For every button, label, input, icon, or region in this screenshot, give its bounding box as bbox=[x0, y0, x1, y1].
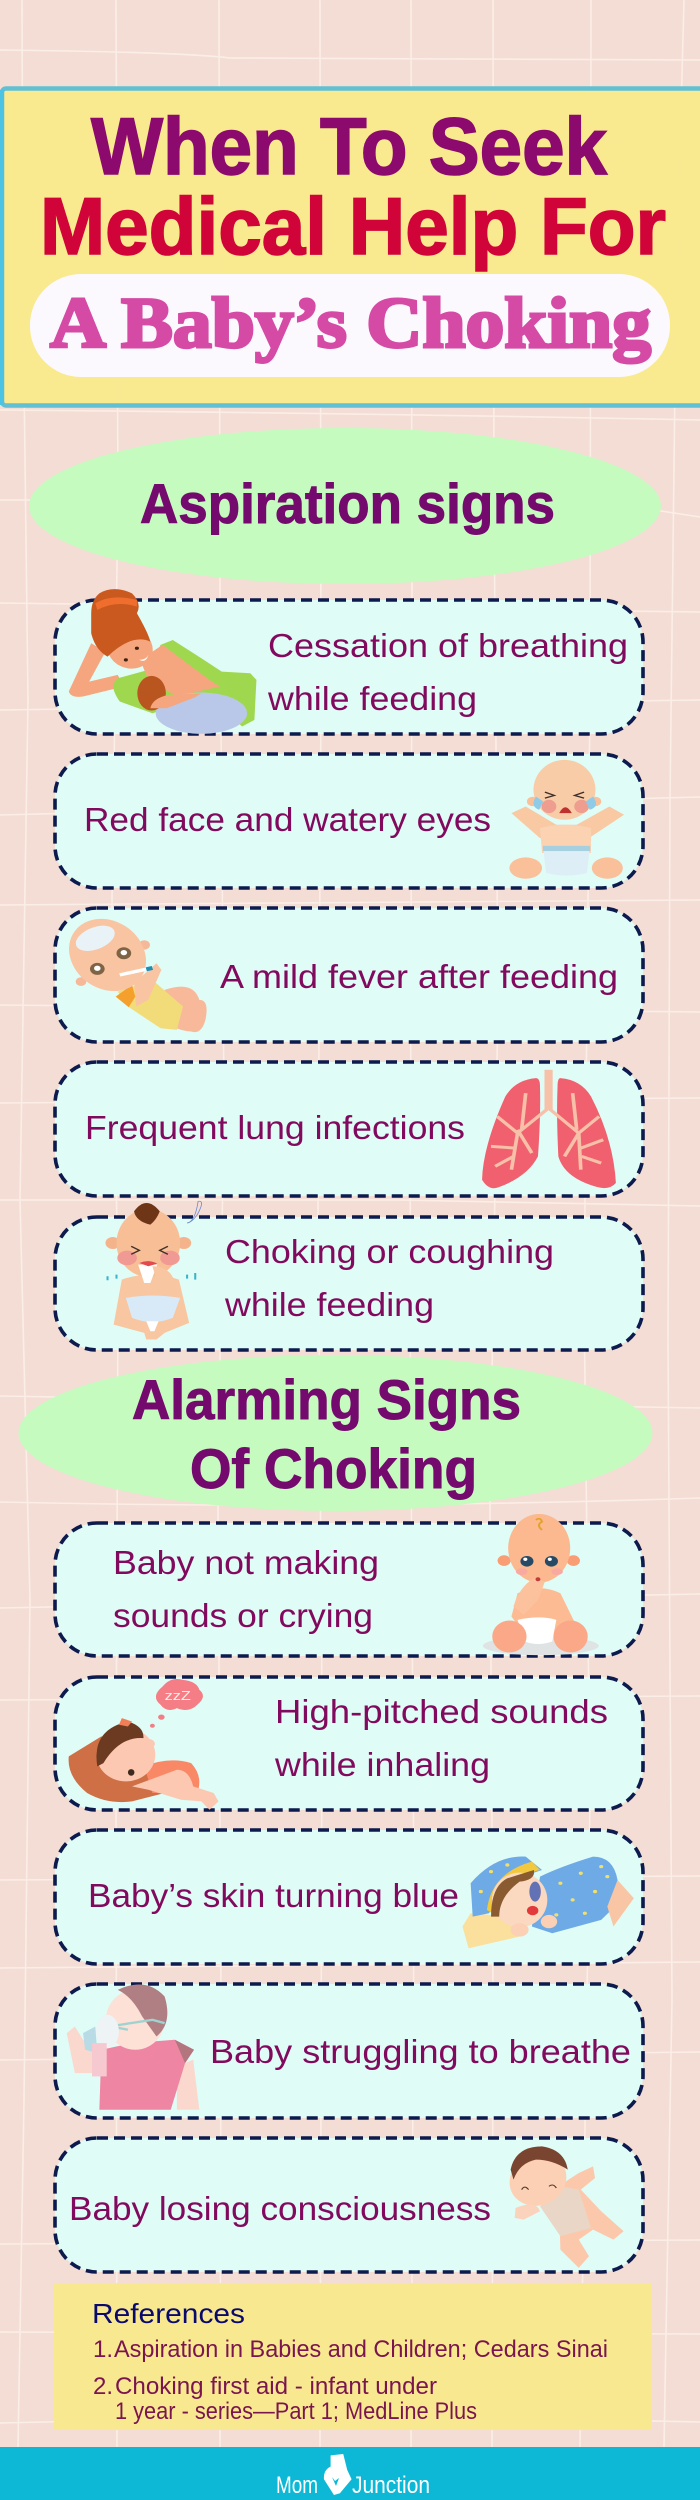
card: choking or coughing bbox=[55, 1201, 643, 1350]
text: while feeding bbox=[224, 1286, 434, 1323]
card: lung infections bbox=[55, 1062, 643, 1196]
text: Red face and watery eyes bbox=[84, 801, 491, 838]
reference list: Aspiration in Babies and Children; Cedars Sinai bbox=[114, 2336, 608, 2363]
title pill: A Baby’s Choking bbox=[50, 283, 651, 363]
icon: baby with nebulizer mask bbox=[67, 1985, 199, 2110]
text: A mild fever after feeding bbox=[220, 958, 618, 995]
footer bar bbox=[0, 2447, 700, 2500]
text bbox=[113, 1544, 379, 1634]
text: while inhaling bbox=[274, 1746, 490, 1783]
icon: crying baby bbox=[509, 760, 624, 879]
icon: lungs bbox=[482, 1070, 616, 1188]
references panel bbox=[54, 2283, 652, 2430]
reference list: 1 year - series—Part 1; MedLine Plus bbox=[115, 2398, 477, 2425]
text bbox=[274, 1693, 608, 1783]
section banner: alarming signs of choking bbox=[18, 1355, 652, 1511]
title pill bbox=[30, 274, 670, 377]
icon: coughing baby bbox=[105, 1201, 202, 1340]
reference list: Choking first aid - infant under bbox=[115, 2373, 437, 2400]
reference list: 1. bbox=[93, 2336, 113, 2363]
card: mild fever bbox=[55, 908, 643, 1042]
reference list bbox=[93, 2336, 608, 2425]
text bbox=[267, 627, 628, 717]
logo: MomJunction: Mom bbox=[276, 2472, 318, 2499]
icon: sleeping baby with dream cloud: zzZ bbox=[165, 1689, 191, 1703]
card: not making sounds bbox=[55, 1514, 643, 1656]
references heading: References bbox=[92, 2298, 245, 2329]
section banner: aspiration signs: Aspiration signs bbox=[140, 472, 555, 535]
card: high pitched sounds bbox=[55, 1677, 643, 1810]
icon: unconscious baby bbox=[501, 2146, 624, 2268]
section banner: alarming signs of choking: Of Choking bbox=[190, 1437, 477, 1500]
logo: MomJunction bbox=[276, 2454, 430, 2499]
icon: baby with thermometer bbox=[55, 908, 207, 1032]
text: Frequent lung infections bbox=[85, 1109, 465, 1146]
text: Baby losing consciousness bbox=[69, 2190, 491, 2227]
icon: mother breastfeeding bbox=[69, 589, 256, 734]
text bbox=[224, 1233, 554, 1323]
card: cessation of breathing bbox=[55, 589, 643, 734]
text: Cessation of breathing bbox=[268, 627, 628, 664]
card: struggling to breathe bbox=[55, 1984, 643, 2118]
text: sounds or crying bbox=[113, 1597, 373, 1634]
header panel bbox=[0, 88, 700, 406]
icon: sleeping baby in blue hood bbox=[462, 1857, 634, 1948]
text: Baby not making bbox=[113, 1544, 379, 1581]
text: Baby’s skin turning blue bbox=[88, 1877, 459, 1914]
card: losing consciousness bbox=[55, 2138, 643, 2272]
icon: sleeping baby with dream cloud bbox=[69, 1679, 218, 1810]
title line 1: When To Seek bbox=[91, 102, 608, 192]
text: while feeding bbox=[267, 680, 477, 717]
icon: sitting baby bbox=[483, 1514, 599, 1655]
section banner: alarming signs of choking: Alarming Signs bbox=[132, 1368, 521, 1431]
card: red face bbox=[55, 754, 643, 888]
reference list: 2. bbox=[93, 2373, 113, 2400]
card: skin turning blue bbox=[55, 1830, 643, 1964]
text: Baby struggling to breathe bbox=[210, 2033, 631, 2070]
section banner: aspiration signs bbox=[29, 428, 661, 584]
title line 2: Medical Help For bbox=[40, 182, 666, 272]
text: High-pitched sounds bbox=[275, 1693, 608, 1730]
logo: MomJunction: Junction bbox=[352, 2472, 430, 2499]
text: Choking or coughing bbox=[225, 1233, 554, 1270]
